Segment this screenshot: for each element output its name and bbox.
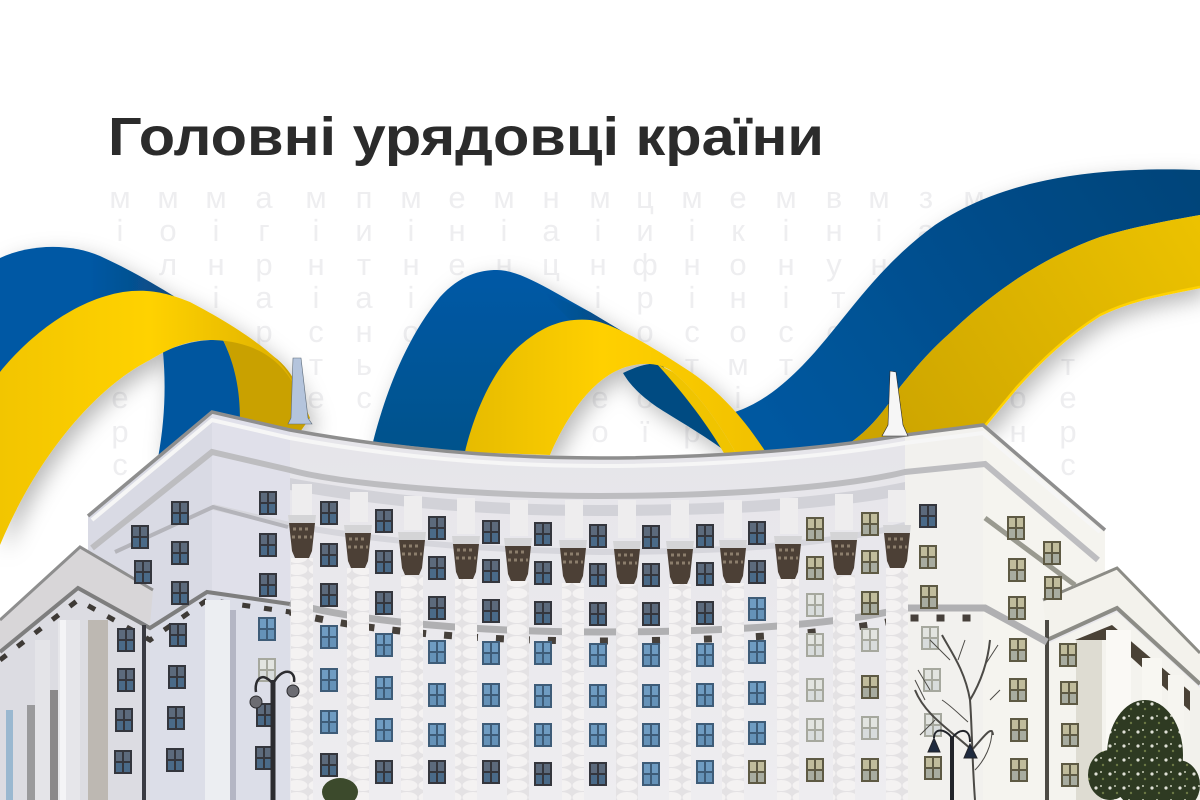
pilasters under the top cornice xyxy=(292,484,906,538)
building silhouette xyxy=(0,412,1200,800)
background letter grid: еесеоіое xyxy=(111,380,1077,415)
spire: left xyxy=(288,358,312,424)
cornices xyxy=(88,412,1105,642)
right lower wing xyxy=(142,568,1200,800)
windows: right sections xyxy=(919,504,1079,787)
central curved facade xyxy=(290,430,905,800)
building: Cabinet of Ministers xyxy=(0,358,1200,800)
left lower wing xyxy=(0,547,290,800)
ribbon: right wave xyxy=(735,169,1200,458)
columns xyxy=(288,515,911,800)
background letter grid: мммампмемнмцмемвмзм xyxy=(109,180,985,215)
ribbon: middle wave xyxy=(373,270,767,456)
background letter grid: сс xyxy=(112,447,1076,482)
background letter grid: рсноососс xyxy=(255,314,842,349)
background letter grid: іаіаііріні т xyxy=(213,280,845,315)
left slanted face xyxy=(88,412,212,625)
green tree: right xyxy=(1088,700,1200,800)
background letter grid: іоігіиініаіиікініа xyxy=(117,213,935,248)
windows: left sections xyxy=(114,491,277,774)
title: Головні урядовці країни xyxy=(108,107,824,167)
background letter grid: лнрнтненцнфнонун xyxy=(159,247,888,282)
ribbon: left wave xyxy=(0,247,310,545)
bare tree xyxy=(915,635,1000,800)
spire: right xyxy=(882,371,908,436)
small tree: left xyxy=(322,778,358,800)
background letter grid: тьтмтт xyxy=(309,347,1075,382)
ribbons: Ukrainian flag waves xyxy=(0,169,1200,545)
background letter grid: роїрнр xyxy=(111,414,1077,449)
street lamp: right xyxy=(928,730,977,800)
background letter grid xyxy=(109,180,1077,482)
right faces xyxy=(905,425,983,800)
street lamp: left xyxy=(250,672,299,800)
mid storey band xyxy=(213,507,905,552)
recessed shade band xyxy=(290,478,905,516)
windows: central facade xyxy=(320,501,879,786)
